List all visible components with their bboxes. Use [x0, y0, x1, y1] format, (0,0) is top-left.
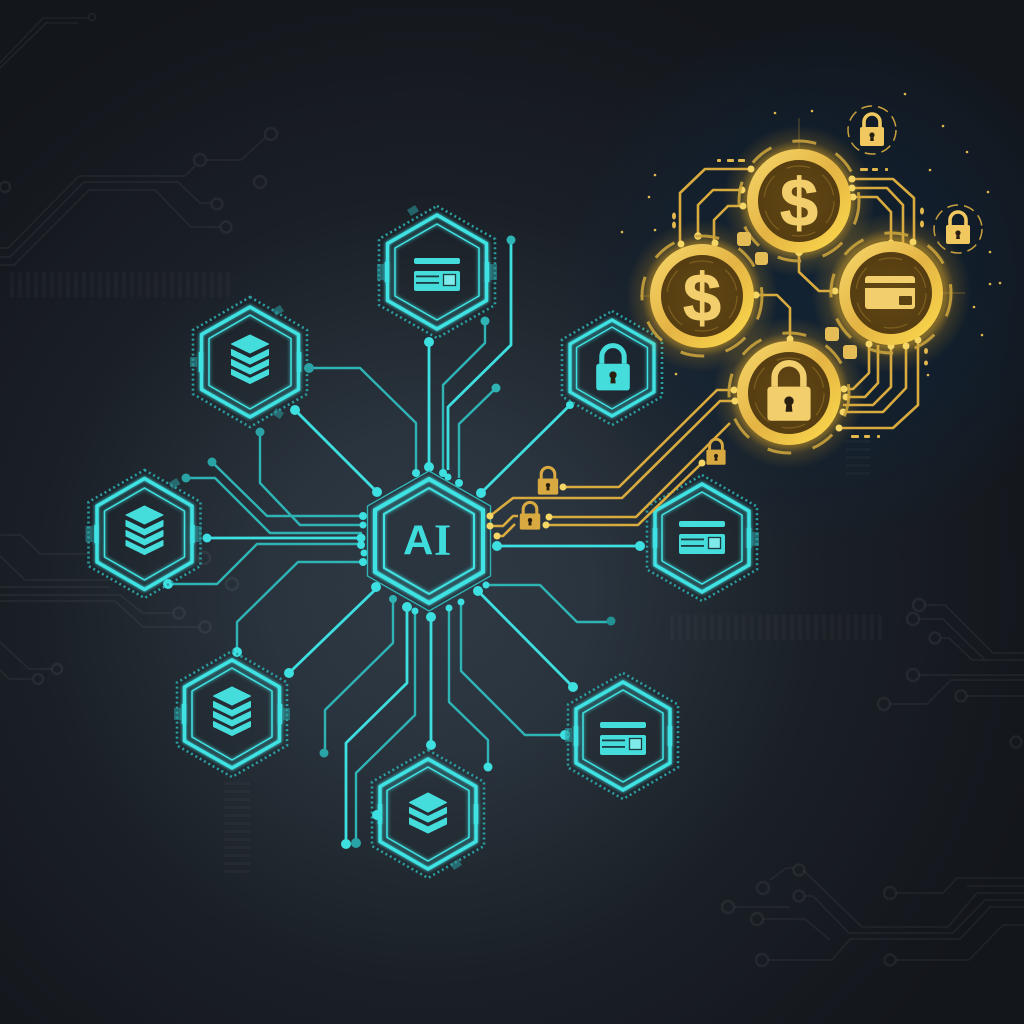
gold sparkle particles [621, 93, 1001, 438]
coin: top dollar [739, 141, 859, 261]
padlock badge: top right [848, 106, 896, 154]
hexagon node: lower-left stacked layers [174, 651, 290, 777]
coin: right credit card [831, 233, 951, 353]
hexagon node: lower-right credit card [565, 673, 678, 799]
coin: left dollar [642, 236, 762, 356]
AI label: I [434, 516, 451, 564]
AI label: A [403, 516, 433, 564]
gold square chips [737, 232, 857, 359]
padlock badge: far right [934, 205, 982, 253]
hexagon node: left stacked layers [86, 470, 202, 598]
gold coin halos [626, 125, 971, 469]
coin: left dollar: $ [683, 260, 721, 336]
coin: top dollar: $ [780, 165, 818, 241]
gold lens flares [640, 118, 965, 296]
gold circuit traces [486, 166, 922, 540]
hexagon node: top credit card [377, 205, 497, 338]
small gold padlocks on traces [520, 439, 726, 530]
hexagon node: bottom stacked layers [372, 750, 484, 878]
hexagon node: right credit card [647, 475, 759, 601]
cyan circuit traces [163, 236, 645, 849]
hexagon node: upper-left stacked layers [190, 297, 307, 427]
hexagon node: padlock [562, 311, 662, 425]
central AI hub [368, 471, 490, 611]
background barcode stripes [10, 272, 882, 873]
coin: bottom padlock [729, 333, 849, 453]
